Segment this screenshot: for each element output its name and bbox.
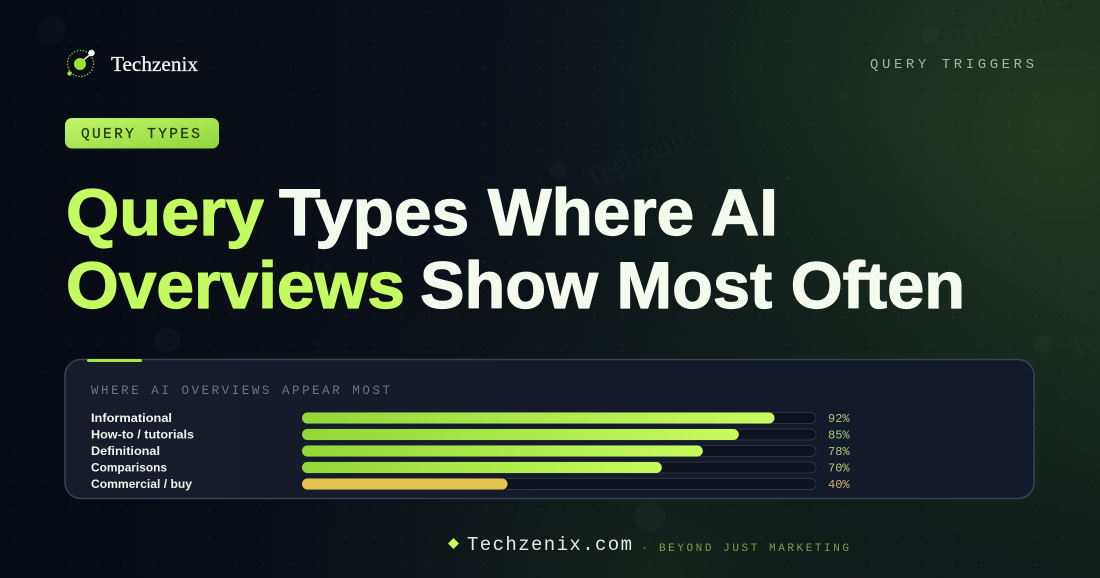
- panel: where AI overviews appear most: [65, 359, 1034, 498]
- row: how-to 85%: How-to / tutorials: [91, 428, 194, 442]
- icon: orbit mark: [67, 50, 95, 76]
- row: comparisons 70%: Comparisons: [91, 460, 167, 474]
- row: commercial 40%: 40%: [828, 478, 850, 492]
- footer site: Techzenix.com: [467, 534, 632, 556]
- row: informational 92%: Informational: [91, 411, 172, 425]
- wordmark: Techzenix: [111, 52, 199, 76]
- title: [66, 175, 965, 322]
- row: how-to 85%: 85%: [828, 428, 850, 442]
- badge: query types: [65, 118, 219, 148]
- title: Show Most Often: [420, 248, 965, 322]
- row: how-to 85%: [91, 428, 850, 442]
- row: informational 92%: 92%: [828, 412, 850, 426]
- faint watermarks: Techzenix: [214, 245, 339, 326]
- footer: [448, 534, 849, 556]
- panel accent: [87, 359, 142, 362]
- row: commercial 40%: [91, 477, 850, 492]
- title: Overviews: [66, 248, 405, 322]
- row: definitional 78%: Definitional: [91, 444, 160, 458]
- top-right label: QUERY TRIGGERS: [870, 57, 1034, 73]
- icon: footer diamond: [448, 538, 459, 549]
- row: comparisons 70%: [91, 460, 850, 476]
- row: commercial 40%: Commercial / buy: [91, 477, 192, 491]
- panel heading: WHERE AI OVERVIEWS APPEAR MOST: [91, 384, 390, 398]
- row: informational 92%: [91, 411, 850, 426]
- faint watermarks: Techzenix: [579, 115, 704, 196]
- badge: query types: QUERY TYPES: [81, 127, 200, 143]
- row: comparisons 70%: 70%: [828, 462, 850, 476]
- title: Query: [66, 175, 264, 249]
- row: definitional 78%: [91, 444, 850, 459]
- footer tagline: BEYOND JUST MARKETING: [659, 543, 849, 555]
- logo: [67, 50, 199, 76]
- row: definitional 78%: 78%: [828, 445, 850, 459]
- title: Types Where AI: [279, 175, 778, 249]
